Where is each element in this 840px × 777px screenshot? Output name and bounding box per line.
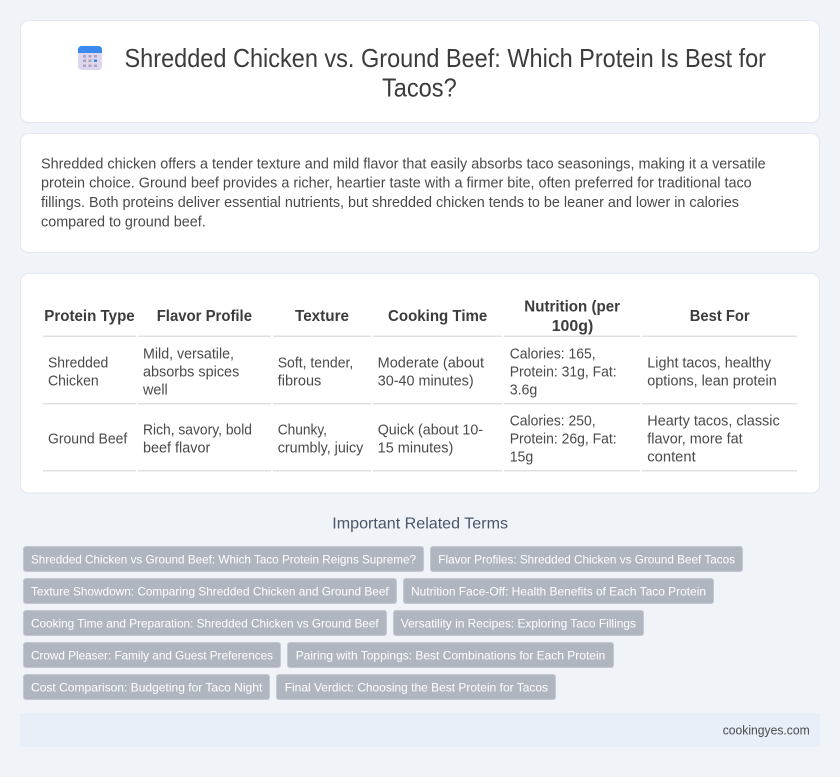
related term tags xyxy=(24,546,742,700)
table header row: Protein Type xyxy=(44,308,135,325)
table row: ground beef: 15g xyxy=(510,450,533,466)
table row: shredded chicken xyxy=(48,346,777,398)
table header row: Best For xyxy=(690,308,750,325)
summary text xyxy=(41,156,766,230)
table header row: Texture xyxy=(295,308,349,325)
table row: ground beef: Rich, savory, bold xyxy=(143,422,252,438)
tag xyxy=(394,610,644,636)
tag xyxy=(24,546,424,572)
tag xyxy=(24,578,396,604)
panel: header xyxy=(20,20,820,122)
table row: ground beef: Ground Beef xyxy=(48,431,128,447)
tag: Cooking Time and Preparation: Shredded Chicken vs Ground Beef xyxy=(31,616,379,630)
table row: shredded chicken: Soft, tender, xyxy=(278,355,353,371)
table row: shredded chicken: 3.6g xyxy=(510,382,537,398)
title: Shredded Chicken vs. Ground Beef: Which Protein Is Best for xyxy=(124,45,766,73)
table row: ground beef: flavor, more fat xyxy=(647,432,743,448)
table row: shredded chicken: Shredded xyxy=(48,355,108,371)
table header row: Flavor Profile xyxy=(157,308,252,325)
table row: shredded chicken: Light tacos, healthy xyxy=(647,355,772,371)
footer xyxy=(20,713,820,747)
table header row xyxy=(44,299,750,335)
heading: important related terms: Important Related Terms xyxy=(332,516,508,533)
title: Tacos? xyxy=(382,74,457,102)
footer: cookingyes.com xyxy=(723,722,810,737)
table row: shredded chicken: well xyxy=(142,382,168,398)
table row: shredded chicken: fibrous xyxy=(278,373,321,389)
table row: ground beef xyxy=(48,414,780,466)
table row: ground beef: crumbly, juicy xyxy=(278,440,364,456)
tag: Final Verdict: Choosing the Best Protein for Tacos xyxy=(285,680,548,694)
tag xyxy=(24,642,280,668)
tag: Nutrition Face-Off: Health Benefits of Each Taco Protein xyxy=(411,584,706,598)
table row: shredded chicken: Protein: 31g, Fat: xyxy=(510,364,617,380)
table header row: Cooking Time xyxy=(388,308,487,325)
table row: ground beef: Chunky, xyxy=(278,422,327,438)
table header row: Nutrition (per xyxy=(524,299,620,316)
icon: calendar xyxy=(78,46,102,70)
tag xyxy=(430,546,742,572)
tag: Cost Comparison: Budgeting for Taco Night xyxy=(31,680,263,694)
tag xyxy=(288,642,614,668)
tag: Shredded Chicken vs Ground Beef: Which Taco Protein Reigns Supreme? xyxy=(31,552,416,566)
table row: shredded chicken: Chicken xyxy=(48,373,99,389)
tag: Texture Showdown: Comparing Shredded Chicken and Ground Beef xyxy=(31,584,389,598)
tag xyxy=(24,674,270,700)
summary text: fillings. Both proteins deliver essential nutrients, but shredded chicken tends to be leaner and lower in calories xyxy=(41,195,739,211)
tag: Pairing with Toppings: Best Combinations for Each Protein xyxy=(296,648,605,662)
table header row: 100g) xyxy=(552,318,593,335)
table row: ground beef: Protein: 26g, Fat: xyxy=(510,432,617,448)
table row: shredded chicken: Moderate (about xyxy=(378,355,484,371)
summary text: protein choice. Ground beef provides a richer, heartier taste with a firmer bite, often preferred for traditional taco xyxy=(41,176,752,192)
panel: comparison table xyxy=(20,274,820,493)
summary text: Shredded chicken offers a tender texture and mild flavor that easily absorbs taco seasonings, making it a versatile xyxy=(41,156,766,172)
title xyxy=(124,45,766,102)
tag xyxy=(276,674,556,700)
table row: ground beef: content xyxy=(647,450,696,466)
table row: ground beef: Calories: 250, xyxy=(510,414,596,430)
table row: ground beef: 15 minutes) xyxy=(378,440,453,456)
tag xyxy=(404,578,714,604)
tag: Versatility in Recipes: Exploring Taco Fillings xyxy=(401,616,636,630)
tag: Crowd Pleaser: Family and Guest Preferences xyxy=(31,648,273,662)
panel: summary xyxy=(20,134,820,252)
table row: shredded chicken: absorbs spices xyxy=(143,364,239,380)
table row: ground beef: Quick (about 10- xyxy=(378,422,483,438)
table row: shredded chicken: 30-40 minutes) xyxy=(378,373,474,389)
tag xyxy=(24,610,386,636)
table row: shredded chicken: options, lean protein xyxy=(647,373,777,389)
table row: ground beef: Hearty tacos, classic xyxy=(647,414,780,430)
summary text: compared to ground beef. xyxy=(41,214,206,230)
table row: ground beef: beef flavor xyxy=(143,440,211,456)
table row: shredded chicken: Calories: 165, xyxy=(510,346,596,362)
table row: shredded chicken: Mild, versatile, xyxy=(143,346,234,362)
tag: Flavor Profiles: Shredded Chicken vs Ground Beef Tacos xyxy=(438,552,735,566)
